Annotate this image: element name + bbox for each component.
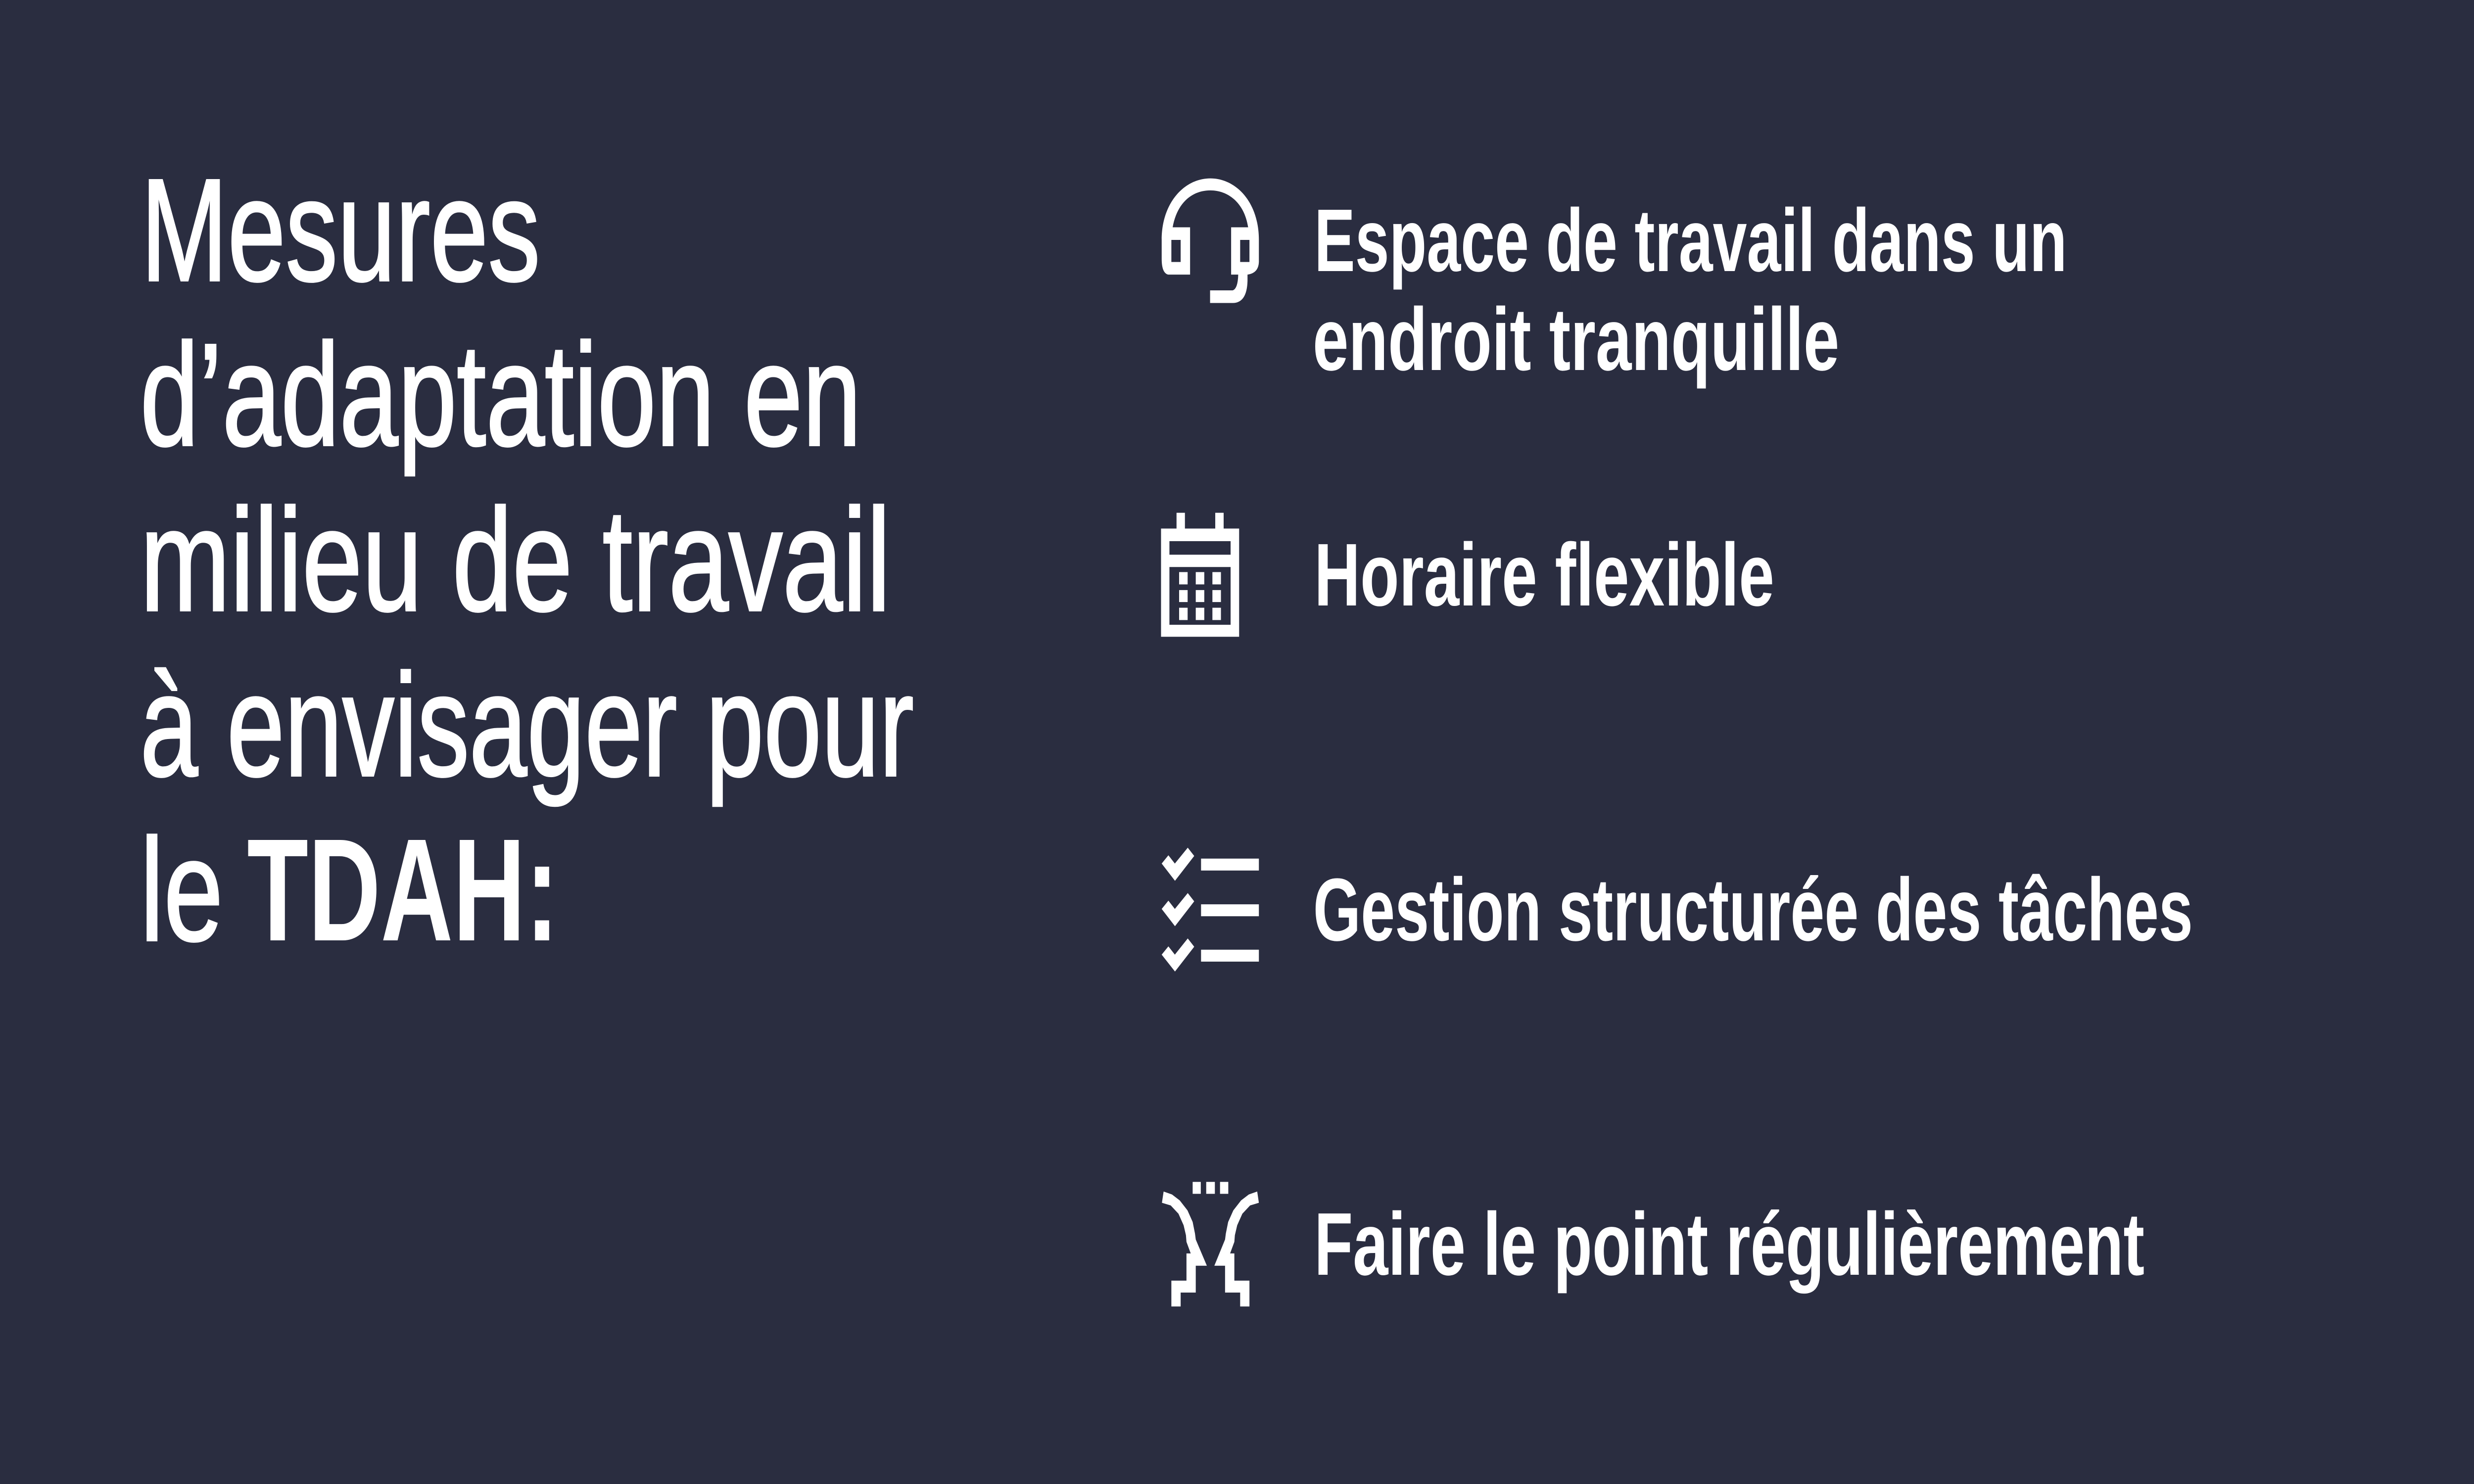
icon: two faces talking (1162, 1182, 1259, 1306)
title: milieu de travail (140, 479, 891, 642)
title (140, 149, 914, 972)
icon: checklist (1162, 848, 1259, 972)
icon: calendar (1161, 513, 1239, 637)
title: à envisager pour (140, 644, 914, 808)
title: d’adaptation en (140, 314, 861, 477)
text: quiet workspace: Espace de travail dans un (1314, 191, 2067, 290)
text: structured tasks: Gestion structurée des tâches (1313, 861, 2193, 960)
title: le (140, 809, 223, 972)
title: TDAH: (247, 809, 559, 972)
text: quiet workspace (1313, 191, 2067, 389)
text: quiet workspace: endroit tranquille (1313, 290, 1839, 389)
title: Mesures (141, 149, 540, 312)
icon: headset (1162, 179, 1259, 303)
text: regular check-ins: Faire le point régulièrement (1314, 1195, 2144, 1294)
text: flexible schedule: Horaire flexible (1314, 526, 1774, 625)
